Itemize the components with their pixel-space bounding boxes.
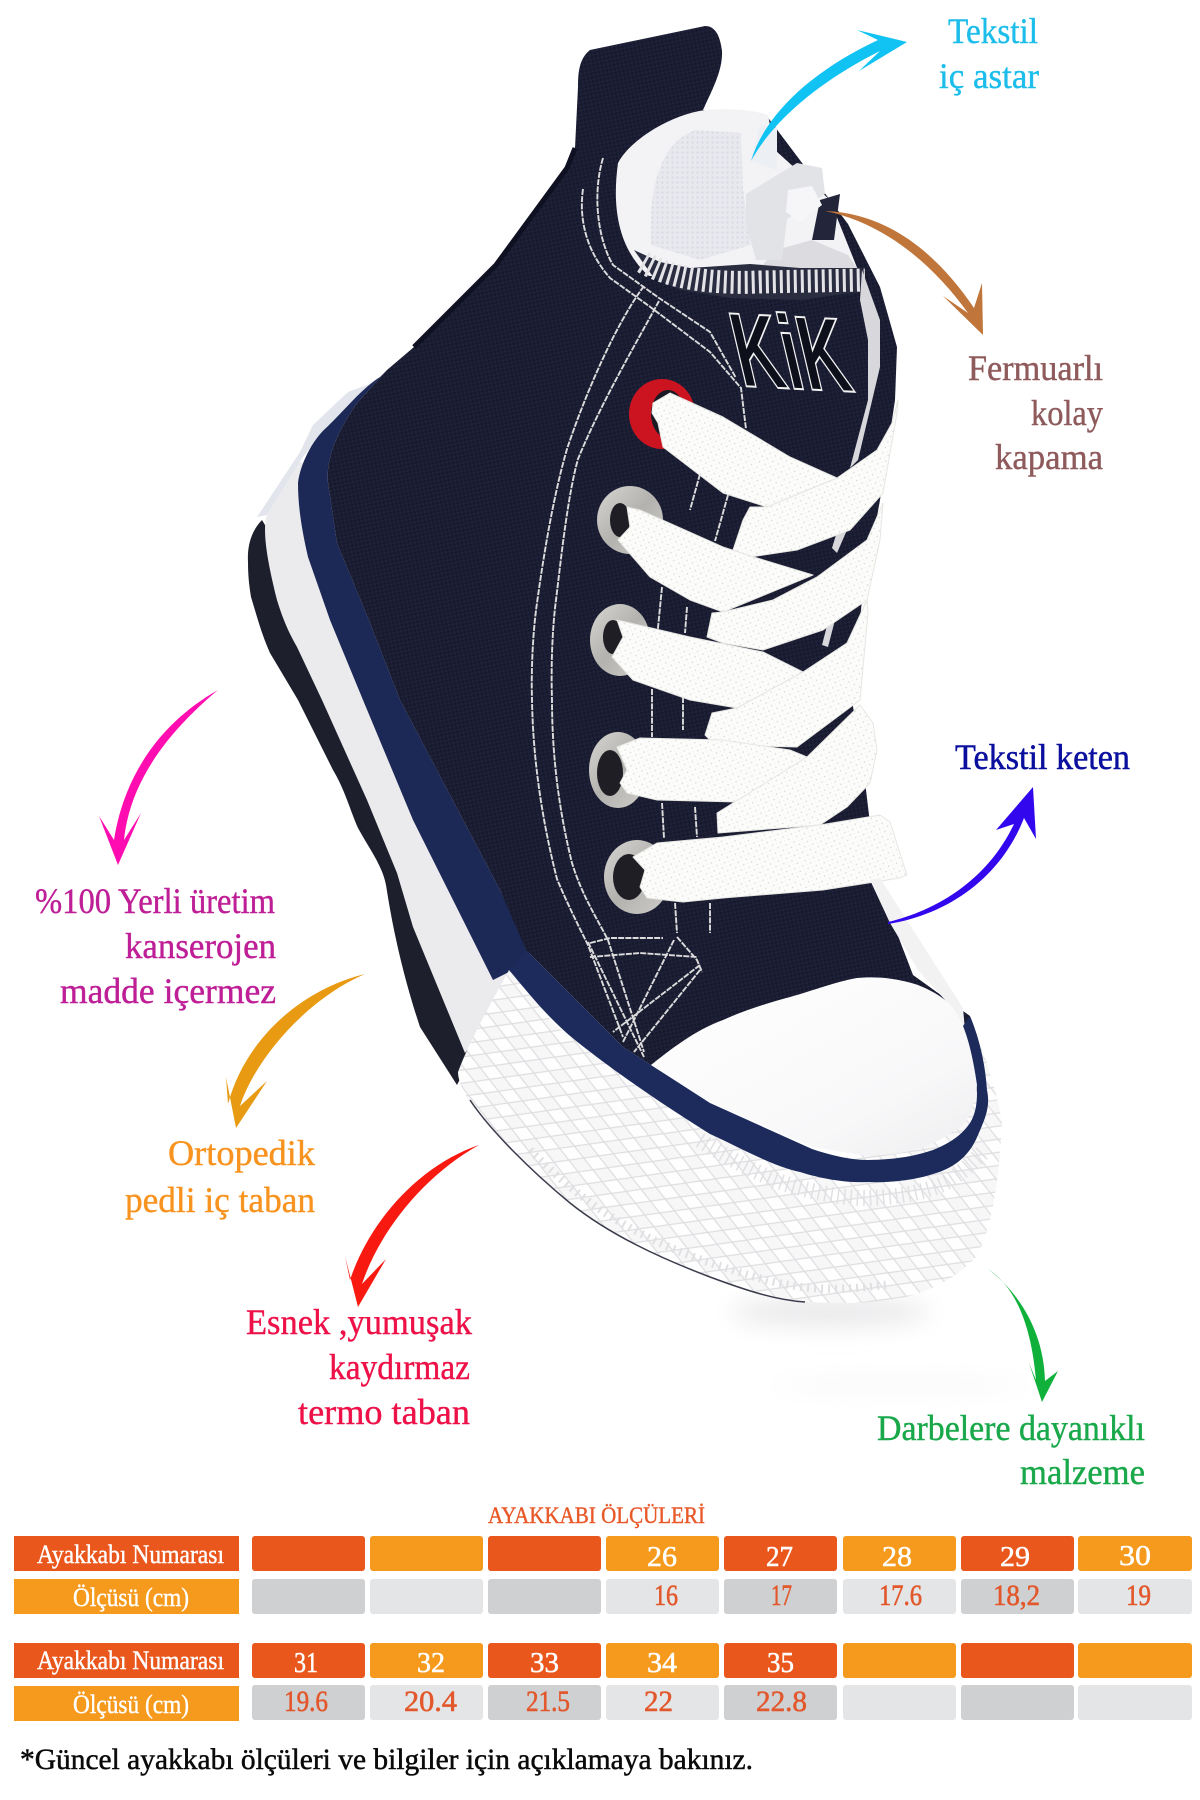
white toe cap [651, 977, 977, 1156]
row: sizes 31 to 35 [252, 1643, 1192, 1679]
row: measures 16 to 19: 17.6 [879, 1579, 922, 1612]
callout: Tekstil iç astar: Tekstil [948, 11, 1038, 51]
row: sizes 26 to 30: 29 [1000, 1541, 1030, 1573]
row: measures 19.6 to 22.8: 22 [644, 1685, 673, 1718]
row: measures 16 to 19: 18,2 [993, 1579, 1040, 1612]
callout: %100 Yerli üretim: %100 Yerli üretim [35, 881, 275, 921]
tongue white trim [870, 878, 965, 1030]
outsole edge line [470, 1100, 805, 1302]
row header: measure 2: Ölçüsü (cm) [73, 1690, 189, 1719]
callout: Fermuarlı kolay kapama [968, 348, 1103, 477]
arrow: magenta production [99, 690, 218, 865]
row: measures 19.6 to 22.8 [252, 1685, 1192, 1720]
arrow: green toe [988, 1269, 1058, 1402]
callout: Tekstil iç astar: iç astar [939, 56, 1039, 96]
toe rubber foxing [458, 970, 1002, 1303]
translucent heel patch [257, 377, 380, 517]
callout: Esnek yumuşak: Esnek ,yumuşak [246, 1302, 472, 1342]
row: sizes 31 to 35: 33 [530, 1647, 559, 1679]
arrow: cyan lining [751, 30, 907, 161]
row: sizes 31 to 35: 34 [647, 1647, 678, 1679]
row: measures 19.6 to 22.8: 19.6 [284, 1685, 328, 1718]
back seam [414, 148, 575, 347]
foxing ribbed rim [530, 1140, 985, 1289]
eyelet: silver 2 [590, 604, 650, 676]
callout: %100 Yerli üretim: madde içermez [60, 971, 276, 1011]
row header: measure 1 [14, 1579, 239, 1614]
heel dark outsole [248, 520, 500, 1085]
callout: Esnek yumuşak [246, 1302, 472, 1432]
row: sizes 31 to 35: 31 [294, 1647, 318, 1679]
navy toe stripe [509, 950, 988, 1182]
callout: Ortopedik pedli iç taban: Ortopedik [168, 1133, 315, 1173]
callout: Esnek yumuşak: kaydırmaz [329, 1347, 470, 1387]
eyelet: silver 4 [604, 840, 670, 914]
callout: Tekstil iç astar [939, 11, 1039, 96]
callout: Fermuarlı kolay kapama: Fermuarlı [968, 348, 1103, 388]
row: sizes 31 to 35: 32 [417, 1647, 445, 1679]
arrow: blue canvas [888, 787, 1036, 924]
callout: Darbelere dayanıklı: malzeme [1020, 1452, 1145, 1492]
arrow: red sole [345, 1145, 479, 1307]
right lining [760, 240, 858, 270]
eyelet: red [629, 379, 695, 449]
callout: Ortopedik pedli iç taban [125, 1133, 315, 1220]
callout: Ortopedik pedli iç taban: pedli iç taban [125, 1180, 315, 1220]
callout: Darbelere dayanıklı [877, 1408, 1145, 1492]
interior lining [616, 109, 858, 276]
callout: Tekstil keten: Tekstil keten [955, 737, 1130, 777]
callout: Fermuarlı kolay kapama: kolay [1031, 393, 1103, 433]
row: measures 16 to 19: 17 [771, 1579, 792, 1612]
size table [14, 1503, 1192, 1721]
row: measures 16 to 19: 16 [654, 1579, 678, 1612]
callout: Fermuarlı kolay kapama: kapama [995, 437, 1103, 477]
callout: Darbelere dayanıklı: Darbelere dayanıklı [877, 1408, 1145, 1448]
row: sizes 31 to 35: 35 [767, 1647, 794, 1679]
white laces [612, 393, 907, 902]
callout: %100 Yerli üretim [35, 881, 276, 1011]
eyelet: silver 3 [589, 732, 647, 808]
row: sizes 26 to 30 [252, 1536, 1192, 1573]
shoe photo illustration [248, 26, 1030, 1389]
callout: Esnek yumuşak: termo taban [298, 1392, 470, 1432]
row header: measure 2 [14, 1686, 239, 1721]
inner mesh [651, 130, 751, 260]
row: measures 19.6 to 22.8: 21.5 [526, 1685, 570, 1718]
row header: sizes 1: Ayakkabı Numarası [37, 1540, 224, 1569]
logo KiK: KiK [720, 290, 861, 414]
row: measures 16 to 19 [252, 1579, 1192, 1614]
row: sizes 26 to 30: 28 [882, 1541, 912, 1573]
row: measures 19.6 to 22.8: 22.8 [756, 1685, 807, 1718]
stitching [532, 158, 746, 1057]
footnote: *Güncel ayakkabı ölçüleri ve bilgiler için açıklamaya bakınız. [20, 1743, 753, 1776]
canvas upper [328, 26, 970, 1100]
knit collar band [634, 250, 868, 300]
inner tongue strips [822, 522, 847, 647]
row: measures 19.6 to 22.8: 20.4 [404, 1685, 457, 1718]
white midsole band [265, 462, 520, 1053]
arrow: brown zipper [825, 211, 983, 335]
soft ground shadow [730, 1298, 1030, 1389]
zipper pull [746, 125, 840, 260]
row: sizes 26 to 30: 30 [1119, 1540, 1151, 1572]
row header: sizes 2: Ayakkabı Numarası [37, 1646, 224, 1675]
row header: measure 1: Ölçüsü (cm) [73, 1583, 189, 1612]
row: sizes 26 to 30: 27 [766, 1541, 793, 1573]
eyelet: silver 1 [597, 486, 663, 554]
callout: %100 Yerli üretim: kanserojen [125, 926, 276, 966]
row: sizes 26 to 30: 26 [647, 1541, 677, 1573]
navy foxing stripe [298, 370, 530, 980]
frayed right edge [850, 270, 880, 468]
row: measures 16 to 19: 19 [1126, 1579, 1151, 1612]
arrow: orange insole [226, 974, 365, 1128]
table title: AYAKKABI ÖLÇÜLERİ [488, 1503, 705, 1528]
